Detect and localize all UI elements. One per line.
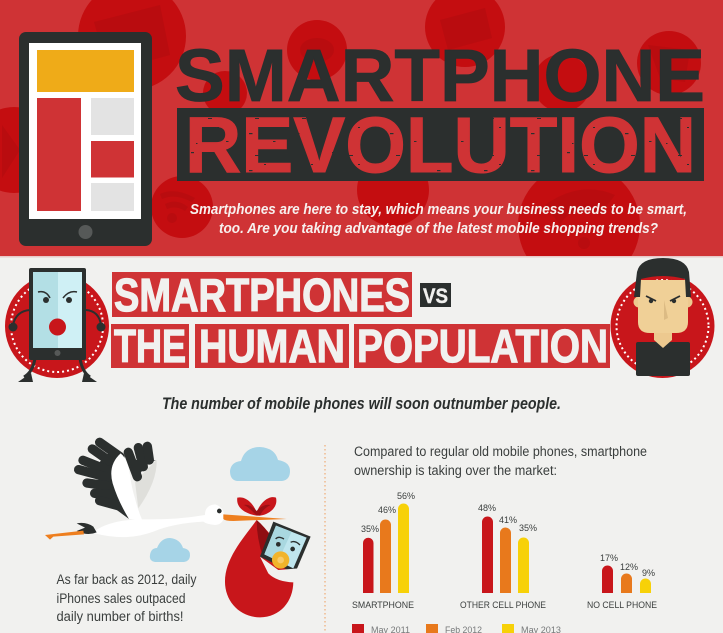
stork back wing xyxy=(135,460,157,508)
legend xyxy=(352,624,561,633)
icon: cloud small xyxy=(150,538,190,562)
text: chart intro xyxy=(354,444,647,478)
text: chart intro: Compared to regular old mobile phones, smartphone xyxy=(354,444,647,459)
heading: Smartphones vs the human population: VS xyxy=(423,285,448,308)
bars: smartphone: 56% xyxy=(397,491,415,501)
bars: other cell phone: 35% xyxy=(519,523,537,533)
bars: other cell phone xyxy=(460,503,546,610)
text: iPhone sales note: As far back as 2012, daily xyxy=(56,572,197,587)
stork body and neck xyxy=(95,504,224,537)
bundle bow xyxy=(237,497,276,516)
text: iPhone sales note: iPhones sales outpaced xyxy=(56,591,186,606)
stork beak xyxy=(223,514,287,521)
icon: stork carrying bundle xyxy=(45,442,311,617)
text: header subtitle: too. Are you taking advantage of the latest mobile shopping trends? xyxy=(219,221,658,237)
icon: cloud large xyxy=(230,447,290,481)
icon: angry phone mascot xyxy=(5,268,109,382)
bars: no cell phone: 9% xyxy=(642,568,655,578)
panel: red header banner xyxy=(0,0,723,256)
bars: no cell phone: NO CELL PHONE xyxy=(587,600,657,610)
heading: Smartphones vs the human population: THE xyxy=(114,320,186,372)
heading: Smartphones vs the human population xyxy=(111,269,610,372)
title: Smartphone: SMARTPHONE xyxy=(175,34,705,117)
bars: smartphone xyxy=(352,491,415,610)
text: header subtitle: Smartphones are here to stay, which means your business needs to be smart, xyxy=(190,202,687,218)
stork front wing xyxy=(98,453,129,519)
text: iPhone sales note: daily number of births! xyxy=(56,609,184,624)
bundle sack xyxy=(225,520,293,617)
baby phone xyxy=(260,522,311,582)
bars: other cell phone: 48% xyxy=(478,503,496,513)
bars: smartphone: 35% xyxy=(361,524,379,534)
bars: smartphone: SMARTPHONE xyxy=(352,600,414,610)
icon: tablet illustration xyxy=(19,32,152,246)
text: section subtitle: The number of mobile phones will soon outnumber people. xyxy=(162,395,561,413)
heading: Smartphones vs the human population: SMARTPHONES xyxy=(114,269,410,321)
text: header subtitle xyxy=(190,202,687,237)
background icon circles xyxy=(0,0,701,256)
icon: angry man portrait xyxy=(610,258,714,378)
bars: other cell phone: 41% xyxy=(499,515,517,525)
stork legs xyxy=(45,531,84,540)
bars: smartphone: 46% xyxy=(378,505,396,515)
bars: other cell phone: OTHER CELL PHONE xyxy=(460,600,546,610)
text: chart intro: ownership is taking over the market: xyxy=(354,463,557,478)
title: Revolution: REVOLUTION xyxy=(185,100,696,189)
bars: no cell phone: 12% xyxy=(620,562,638,572)
heading: Smartphones vs the human population: HUMAN xyxy=(199,320,345,372)
bars: no cell phone xyxy=(587,553,657,610)
stork tail xyxy=(77,523,97,534)
text: iPhone sales note xyxy=(56,572,197,624)
bars: no cell phone: 17% xyxy=(600,553,618,563)
bar chart: phone ownership xyxy=(352,491,657,610)
heading: Smartphones vs the human population: POPULATION xyxy=(357,320,608,372)
